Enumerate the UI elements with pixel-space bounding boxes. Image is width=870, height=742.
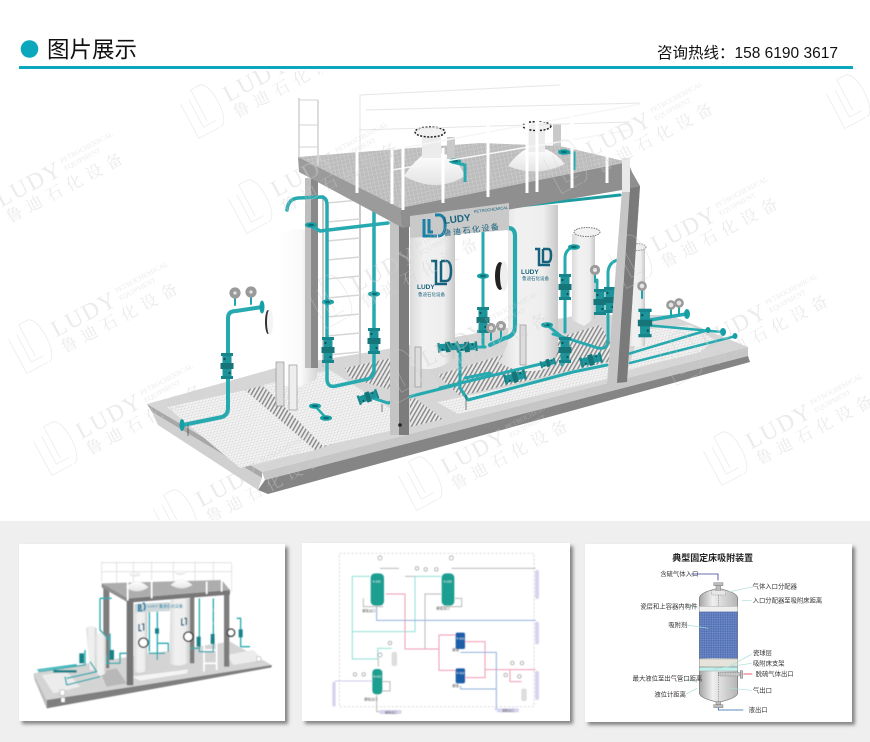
thumb vessels (86, 598, 190, 675)
outlet nozzle (718, 671, 743, 678)
sign board (410, 203, 509, 238)
watermark tile: 鲁迪石化设备 (3, 146, 131, 227)
skid base (147, 315, 750, 494)
watermark tile: PETROCHEMICAL (286, 25, 341, 60)
watermark tile: 鲁迪石化设备 (230, 41, 358, 122)
thumb sign: LUDY 鲁迪石化设备 (147, 602, 183, 608)
sign chinese text: 鲁迪石化设备 (443, 221, 501, 238)
deck pipes (449, 149, 574, 182)
watermark tile: LUDY (347, 241, 422, 298)
near corner column (390, 212, 409, 435)
tag labels: 解吸出口 (436, 606, 450, 611)
railing (298, 85, 640, 210)
watermark tile: EQUIPMENT (143, 378, 183, 404)
heading rule (19, 66, 853, 69)
watermark tile: EQUIPMENT (118, 276, 158, 302)
thumb railing (102, 562, 232, 592)
process piping (180, 195, 738, 431)
watermark tile (180, 71, 324, 139)
thumbnail 3 card (585, 544, 852, 722)
left inlet pipe (180, 288, 264, 431)
right column (607, 186, 640, 384)
level gauges and supports (188, 325, 526, 436)
far right vessel (628, 244, 646, 346)
watermark tile (311, 218, 476, 329)
callouts: 气体入口分配器 (753, 582, 798, 591)
deck top surface (298, 143, 628, 208)
watermark tile: EQUIPMENT (338, 136, 378, 162)
rear-left column (305, 178, 318, 368)
right dome and nozzle (508, 122, 565, 172)
thumb deck (102, 580, 230, 603)
watermark tile: PETROCHEMICAL (714, 175, 769, 210)
thumbnail 2 card (302, 543, 570, 721)
ceramic ball layer (699, 659, 738, 667)
tag labels: 解吸出口 (362, 608, 376, 613)
thumbnail 1 card (19, 544, 285, 721)
watermark tile: PETROCHEMICAL (139, 362, 194, 397)
watermark tile: PETROCHEMICAL (59, 130, 114, 165)
tag labels: 解吸 (452, 647, 460, 652)
vessel tags (373, 580, 465, 679)
thumb columns (103, 587, 229, 668)
callouts: 液出口 (749, 705, 768, 714)
watermark tile: LUDY (647, 201, 722, 258)
watermark tile: LUDY (417, 316, 492, 373)
vessel tags: F-102 (457, 671, 465, 675)
callouts: 瓷层和上容器内构件 (640, 602, 698, 611)
bottom nozzle (714, 702, 723, 708)
vessel 2 logo: 鲁迪石化设备 (522, 275, 549, 282)
blue vessels (456, 633, 465, 683)
watermark tile: LUDY (742, 398, 817, 455)
watermark tile (154, 433, 316, 520)
grey tanks (392, 652, 526, 701)
watermark tile (826, 74, 870, 129)
vessel 2 logo: LUDY (521, 269, 539, 276)
vessel tags: D-101 (373, 675, 382, 679)
thumb base (33, 642, 272, 708)
callouts: 脱硫气体出口 (756, 669, 794, 678)
floor gratings (167, 325, 715, 468)
vessel shell (699, 588, 738, 702)
vessel 2 (495, 205, 558, 371)
heading: 图片展示: 图片展示 (47, 38, 137, 62)
thumb pipework (37, 598, 250, 685)
pink lines (386, 594, 536, 682)
watermark tile: LUDY (582, 106, 657, 163)
callouts: 含硫气体入口 (660, 569, 698, 578)
thumb sign (134, 602, 183, 613)
callouts: 最大液位至出气管口距离 (633, 673, 702, 682)
watermark tile: 鲁迪石化设备 (58, 276, 186, 357)
watermark tile (658, 275, 826, 386)
ladder (323, 195, 360, 367)
thumbnail 2: process flow diagram (332, 553, 539, 714)
ladder side loop (287, 197, 388, 386)
watermark tile: 鲁迪石化设备 (358, 231, 486, 312)
watermark tile: EQUIPMENT (718, 191, 758, 217)
watermark tile: PETROCHEMICAL (809, 372, 864, 407)
deck front beams (298, 157, 640, 228)
hotline: 咨询热线：158 6190 3617 (657, 44, 838, 62)
thumbnail strip background (0, 521, 870, 742)
watermark tile: PETROCHEMICAL (414, 215, 469, 250)
right column shade (617, 186, 640, 383)
watermark tile (398, 407, 566, 511)
watermark tile: LUDY (697, 298, 772, 355)
tag labels: 解吸 (452, 683, 460, 688)
tag labels (362, 606, 460, 701)
watermarks (0, 71, 870, 520)
middle manifold (437, 341, 607, 400)
right risers (541, 244, 618, 365)
watermark tile: LUDY (219, 51, 294, 108)
vessel 1 logo (417, 261, 451, 298)
teal lines (352, 576, 441, 659)
watermark tile (544, 83, 712, 194)
thumb base bolts (60, 657, 261, 702)
watermark tile: PETROCHEMICAL (334, 120, 389, 155)
callouts: 入口分配器至吸附床距离 (753, 596, 822, 605)
lower centre run (309, 384, 460, 421)
grey lines (363, 568, 536, 712)
watermark tile: PETROCHEMICAL (484, 290, 539, 325)
vessel tags: A-102 (444, 580, 452, 584)
flow arrows (691, 574, 752, 710)
thumb vessel logos (139, 618, 186, 631)
watermark tile: EQUIPMENT (768, 288, 808, 314)
watermark tile: EQUIPMENT (508, 413, 548, 439)
vessel 2 pipes (476, 228, 515, 345)
thumbnail 3: adsorption vessel diagram (633, 552, 822, 714)
watermark tile: PETROCHEMICAL (259, 430, 314, 465)
watermark tile: 鲁迪石化设备 (708, 288, 836, 369)
thumbnail 1: equipment view (33, 562, 272, 708)
vessel 2 logo (521, 249, 551, 282)
callouts: 气出口 (753, 685, 772, 694)
diagram title: 典型固定床吸附装置 (672, 552, 753, 563)
watermark tile: 鲁迪石化设备 (278, 136, 406, 217)
watermark tile: PETROCHEMICAL (114, 260, 169, 295)
watermark tile: LUDY (47, 286, 122, 343)
deck equipment (404, 122, 574, 185)
watermark tile: EQUIPMENT (653, 96, 693, 122)
upper internals band (699, 606, 738, 612)
flow boundary (339, 553, 534, 707)
watermark tile: EQUIPMENT (418, 231, 458, 257)
lavender line (335, 681, 495, 710)
watermark tile: LUDY (267, 146, 342, 203)
watermark tile: 鲁迪石化设备 (203, 446, 331, 527)
callouts: 吸附剂 (668, 620, 687, 629)
watermark tile: LUDY (437, 423, 512, 480)
right filter vessel (572, 228, 600, 326)
watermark tile: PETROCHEMICAL (649, 80, 704, 115)
right outlet pipes (628, 282, 738, 363)
sign logo (424, 215, 445, 236)
tag labels: 解吸出口 (364, 696, 378, 701)
callouts: 液位计距离 (654, 689, 686, 698)
heading bullet (21, 40, 38, 58)
sign text: LUDY (443, 213, 472, 227)
thumb domes (126, 571, 192, 591)
blue lines (377, 606, 536, 710)
main equipment illustration (147, 85, 750, 494)
pill labels: 解吸出口 (385, 709, 397, 714)
callouts (633, 569, 822, 714)
watermark tile: EQUIPMENT (290, 41, 330, 67)
thumb ladder (204, 598, 217, 672)
watermark tile (8, 263, 176, 374)
callouts: 吸附床支架 (753, 658, 785, 667)
instrument bubbles (353, 556, 524, 678)
thumb corner column (127, 599, 133, 685)
watermark tile: 鲁迪石化设备 (658, 191, 786, 272)
watermark tile: EQUIPMENT (263, 446, 303, 472)
pill labels: 解吸出口 (502, 708, 514, 713)
watermark tile: LUDY (72, 388, 147, 445)
watermark tile: 鲁迪石化设备 (428, 306, 556, 387)
thumb rail posts (128, 580, 222, 601)
watermark tile: EQUIPMENT (488, 306, 528, 332)
teal vessels (371, 573, 454, 694)
vessel 1 (410, 225, 455, 369)
leader lines (685, 587, 753, 694)
watermark tile (378, 293, 546, 402)
sign small text: PETROCHEMICAL (474, 205, 509, 214)
watermark tile (608, 178, 776, 289)
bed support (699, 667, 738, 671)
watermark tile: 鲁迪石化设备 (83, 378, 211, 459)
watermark tile: LUDY (192, 456, 267, 513)
centre line (717, 595, 719, 702)
vessel tags: F-101 (457, 636, 465, 640)
vessel tags: A-101 (373, 580, 381, 584)
watermark tile: EQUIPMENT (813, 388, 853, 414)
watermark tile: PETROCHEMICAL (764, 272, 819, 307)
watermark tile (704, 375, 870, 486)
callouts: 瓷球层 (753, 648, 772, 657)
watermark tile: PETROCHEMICAL (504, 397, 559, 432)
rear-left vessel (265, 229, 317, 387)
right legend pills (332, 570, 539, 714)
vessel 1 logo: LUDY (417, 284, 435, 291)
watermark tile (34, 365, 200, 476)
vessel 1 logo: 鲁迪石化设备 (418, 291, 445, 298)
thumb valves (53, 628, 243, 673)
top nozzle (712, 583, 726, 595)
watermark tile: 鲁迪石化设备 (593, 96, 721, 177)
left dome and nozzle (404, 127, 465, 185)
top cross pipe (510, 195, 620, 207)
adsorbent bed (699, 612, 738, 658)
watermark tile: 鲁迪石化设备 (448, 413, 576, 494)
header (19, 38, 853, 69)
watermark tile (228, 123, 396, 234)
thumb manways (139, 629, 235, 647)
pill labels (385, 708, 514, 714)
watermark tile: EQUIPMENT (63, 146, 103, 172)
